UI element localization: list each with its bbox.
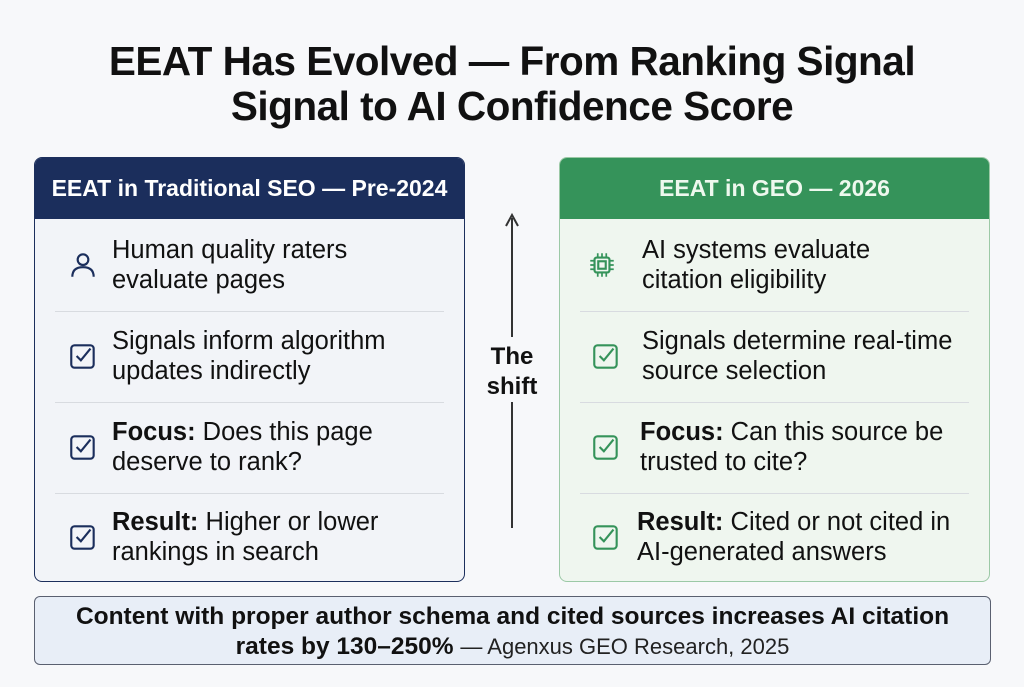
panel: traditional SEO — [34, 157, 465, 582]
row: result: rankings in search — [112, 538, 319, 566]
panel header: GEO — [560, 158, 989, 219]
row: result — [593, 508, 950, 566]
row: AI systems: AI systems evaluate — [642, 236, 870, 264]
panel header: traditional — [35, 158, 464, 219]
icon: checkbox — [70, 525, 95, 550]
icon: checkbox — [70, 344, 95, 369]
row: result: Result: Cited or not cited in — [637, 508, 950, 536]
row: signals inform: updates indirectly — [112, 357, 310, 385]
row: focus: Focus: Does this page — [112, 418, 373, 446]
row: focus — [70, 418, 373, 476]
icon: checkbox — [593, 435, 618, 460]
callout: research stat: Content with proper author schema and cited sources increases AI citation — [76, 603, 949, 630]
callout: research stat — [34, 596, 991, 665]
row: signals determine — [593, 327, 952, 385]
icon: person — [71, 253, 95, 277]
icon: checkbox — [593, 344, 618, 369]
panel header: traditional: EEAT in Traditional SEO — Pre-2024 — [52, 175, 447, 201]
title: Signal to AI Confidence Score — [231, 83, 793, 129]
row: human raters: Human quality raters — [112, 236, 347, 264]
callout: research stat: rates by 130–250% — Agenxus GEO Research, 2025 — [236, 633, 789, 660]
row: focus: trusted to cite? — [640, 448, 807, 476]
row: human raters: evaluate pages — [112, 266, 285, 294]
label: the shift: shift — [487, 373, 537, 400]
label: the shift: The — [491, 343, 533, 370]
row: result: Result: Higher or lower — [112, 508, 378, 536]
row: focus — [593, 418, 943, 476]
label: the shift — [487, 343, 538, 400]
row: result — [70, 508, 378, 566]
row: AI systems: citation eligibility — [642, 266, 826, 294]
title: EEAT Has Evolved — From Ranking Signal — [109, 38, 915, 84]
icon: checkbox — [593, 525, 618, 550]
icon: checkbox — [70, 435, 95, 460]
row: signals determine: Signals determine real-time — [642, 327, 952, 355]
arrow: the shift — [487, 213, 538, 528]
row: signals determine: source selection — [642, 357, 826, 385]
panel: GEO — [559, 157, 990, 582]
title — [109, 38, 915, 129]
row: result: AI-generated answers — [637, 538, 886, 566]
row: focus: deserve to rank? — [112, 448, 302, 476]
row: human raters — [71, 236, 347, 294]
row: AI systems — [590, 236, 870, 294]
row: signals inform: Signals inform algorithm — [112, 327, 386, 355]
row: signals inform — [70, 327, 386, 385]
icon: chip — [590, 253, 614, 277]
panel header: GEO: EEAT in GEO — 2026 — [659, 175, 890, 201]
row: focus: Focus: Can this source be — [640, 418, 943, 446]
